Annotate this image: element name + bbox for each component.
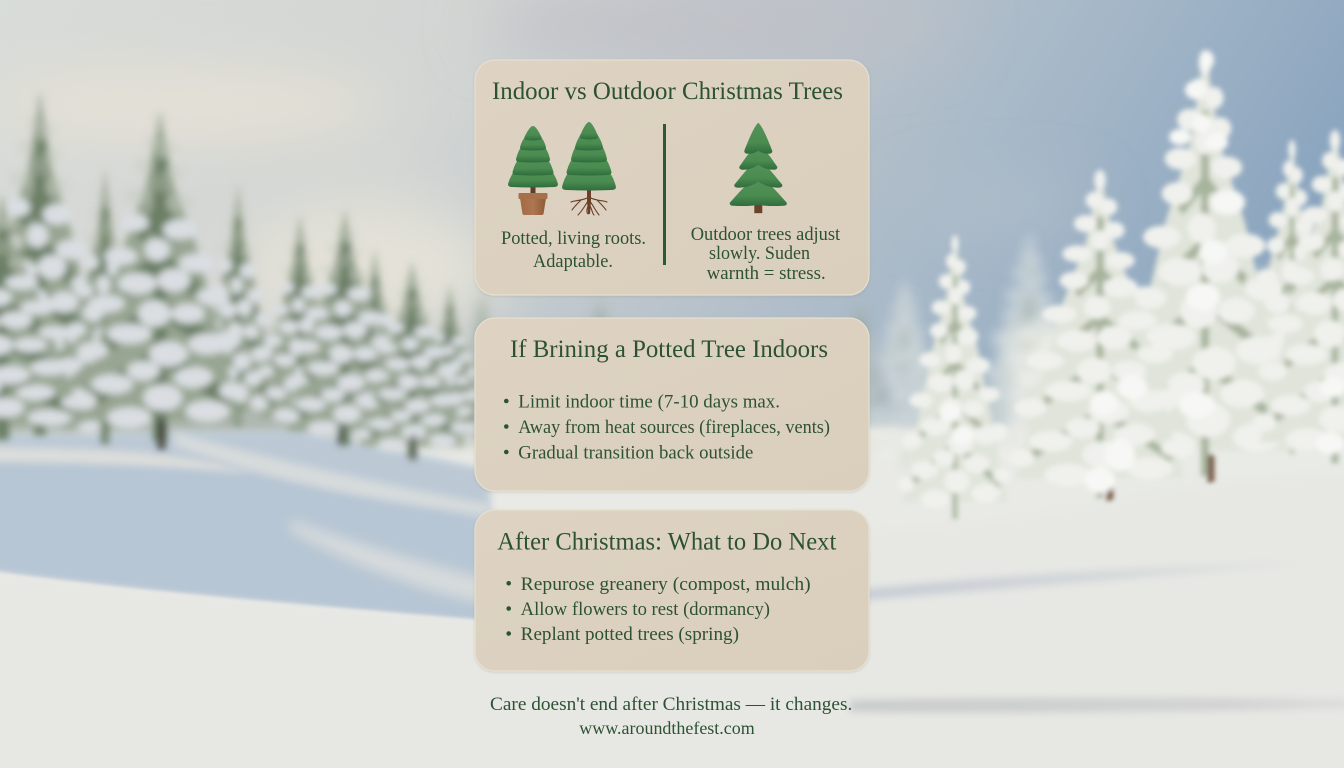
bullet list: indoor tips: Limit indoor time (7-10 days max. xyxy=(518,393,780,413)
text: outdoor caption: Outdoor trees adjust xyxy=(691,225,841,245)
left snowy pines xyxy=(0,92,487,460)
heading: potted tree indoors: If Brining a Potted Tree Indoors xyxy=(510,336,828,363)
text: outdoor caption xyxy=(691,225,841,284)
panel: indoor vs outdoor xyxy=(475,60,869,295)
near snow hills xyxy=(0,470,1344,768)
distant trees xyxy=(444,235,1092,470)
bullet list: indoor tips xyxy=(504,393,830,463)
left snow drift shadows xyxy=(0,432,490,622)
footer website: www.aroundthefest.com xyxy=(579,718,755,738)
bullet list: indoor tips: Away from heat sources (fireplaces, vents) xyxy=(518,418,830,438)
icon: potted tree xyxy=(508,126,558,215)
bullet list: after christmas tips xyxy=(506,575,811,645)
text: outdoor caption: warnth = stress. xyxy=(707,264,826,284)
panel: bringing a potted tree indoors xyxy=(475,318,869,491)
panel: after christmas xyxy=(475,510,869,671)
snow ground back xyxy=(0,425,1344,768)
text: potted caption: Adaptable. xyxy=(533,252,613,272)
text: potted caption: Potted, living roots. xyxy=(501,229,646,249)
sky xyxy=(0,0,1344,560)
icon: tree with bare roots xyxy=(562,122,616,215)
divider xyxy=(663,124,666,265)
bullet list: indoor tips: Gradual transition back outside xyxy=(518,443,753,463)
bullet list: after christmas tips: Repurose greanery (compost, mulch) xyxy=(521,575,811,595)
left snow behind trees xyxy=(0,430,490,520)
text: outdoor caption: slowly. Suden xyxy=(709,244,810,264)
icon: outdoor tree xyxy=(730,123,787,213)
text: potted caption xyxy=(501,229,646,272)
footer tagline: Care doesn't end after Christmas — it changes. xyxy=(490,694,852,715)
bullet list: after christmas tips: Replant potted trees (spring) xyxy=(521,625,739,645)
bullet list: after christmas tips: Allow flowers to rest (dormancy) xyxy=(521,600,770,620)
snow clumps xyxy=(939,51,1344,493)
heading: indoor vs outdoor: Indoor vs Outdoor Christmas Trees xyxy=(492,78,843,105)
distant tree haze xyxy=(0,260,1344,480)
heading: after christmas: After Christmas: What to Do Next xyxy=(497,528,836,555)
right snowy pines xyxy=(898,50,1344,519)
